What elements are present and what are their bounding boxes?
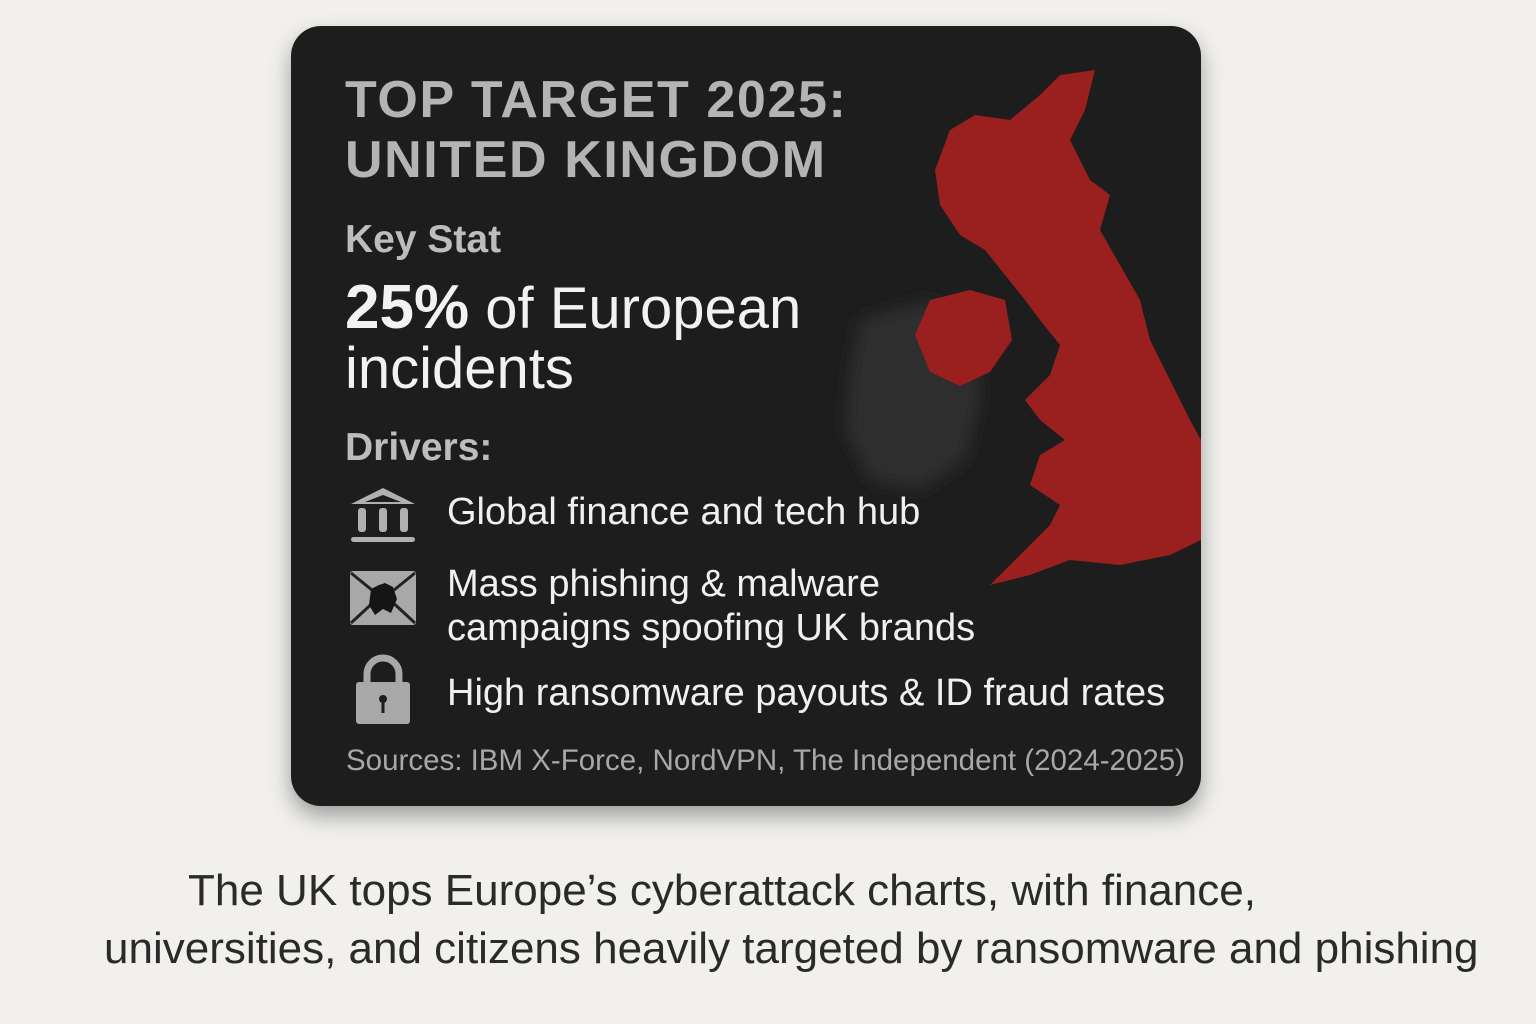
text: driver 2: campaigns spoofing UK brands [447, 607, 975, 649]
title [345, 71, 847, 189]
text: stat: incidents [345, 336, 574, 401]
text: driver 2: Mass phishing & malware [447, 563, 880, 605]
text: stat [345, 273, 801, 401]
title: UNITED KINGDOM [345, 131, 827, 189]
text: driver 2 [447, 563, 975, 649]
panel: UK card [291, 26, 1201, 806]
caption: The UK tops Europe’s cyberattack charts, with finance, [188, 866, 1256, 915]
text: sources: Sources: IBM X-Force, NordVPN, The Independent (2024-2025) [346, 744, 1185, 777]
heading: key stat: Key Stat [345, 218, 501, 261]
title: TOP TARGET 2025: [345, 71, 847, 129]
icon: envelope [350, 571, 416, 625]
heading: drivers: Drivers: [345, 426, 492, 469]
map: UK and Ireland [846, 70, 1201, 585]
text: driver 1: Global finance and tech hub [447, 491, 920, 533]
text: driver 3: High ransomware payouts & ID fraud rates [447, 672, 1165, 714]
caption [104, 866, 1479, 973]
icon: padlock [356, 654, 410, 724]
text: stat: 25% of European [345, 273, 801, 342]
icon: bank [351, 488, 415, 542]
caption: universities, and citizens heavily targeted by ransomware and phishing [104, 924, 1479, 973]
